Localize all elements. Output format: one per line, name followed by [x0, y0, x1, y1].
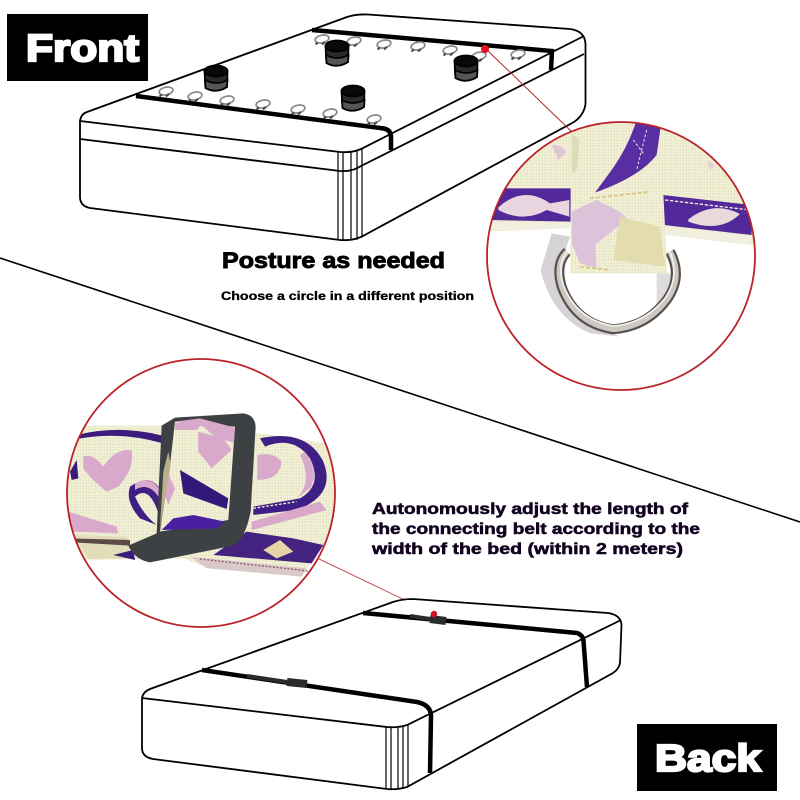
- caption: posture: Choose a circle in a different position: [221, 291, 474, 303]
- detail circle: buckle: [60, 359, 337, 627]
- buckle: [128, 413, 256, 562]
- strap: back: [312, 30, 552, 70]
- strap: front: [136, 96, 391, 150]
- belt: [60, 426, 337, 577]
- D-rings: [158, 34, 526, 125]
- diagonal divider: [0, 258, 800, 522]
- heading: posture: Posture as needed: [222, 248, 445, 273]
- detail circle: D-ring: [480, 120, 760, 390]
- text: adjust belt: [371, 501, 700, 558]
- strap: back: [363, 613, 587, 687]
- ring: [559, 252, 676, 329]
- pointer: top: [481, 45, 572, 132]
- strap: front: [202, 670, 431, 773]
- text: adjust belt: the connecting belt according to the: [372, 521, 700, 538]
- illustration: back mattress: [142, 599, 622, 789]
- marker: bottom: [431, 611, 437, 617]
- cuffs: [204, 40, 478, 111]
- badge: Front: Front: [26, 28, 139, 70]
- fold: [160, 422, 235, 532]
- text: adjust belt: width of the bed (within 2 meters): [371, 541, 683, 558]
- pointer: bottom: [317, 558, 434, 614]
- badge: Front: [7, 14, 148, 81]
- shadow: [541, 233, 620, 337]
- fabric band: [490, 130, 754, 246]
- illustration: front mattress: [80, 14, 586, 240]
- buckle: back: [410, 616, 446, 621]
- strap: [570, 188, 668, 274]
- text: adjust belt: Autonomously adjust the length of: [372, 501, 689, 518]
- badge: Back: Back: [655, 738, 762, 780]
- buckle: front: [247, 676, 307, 684]
- badge: Back: [637, 724, 777, 791]
